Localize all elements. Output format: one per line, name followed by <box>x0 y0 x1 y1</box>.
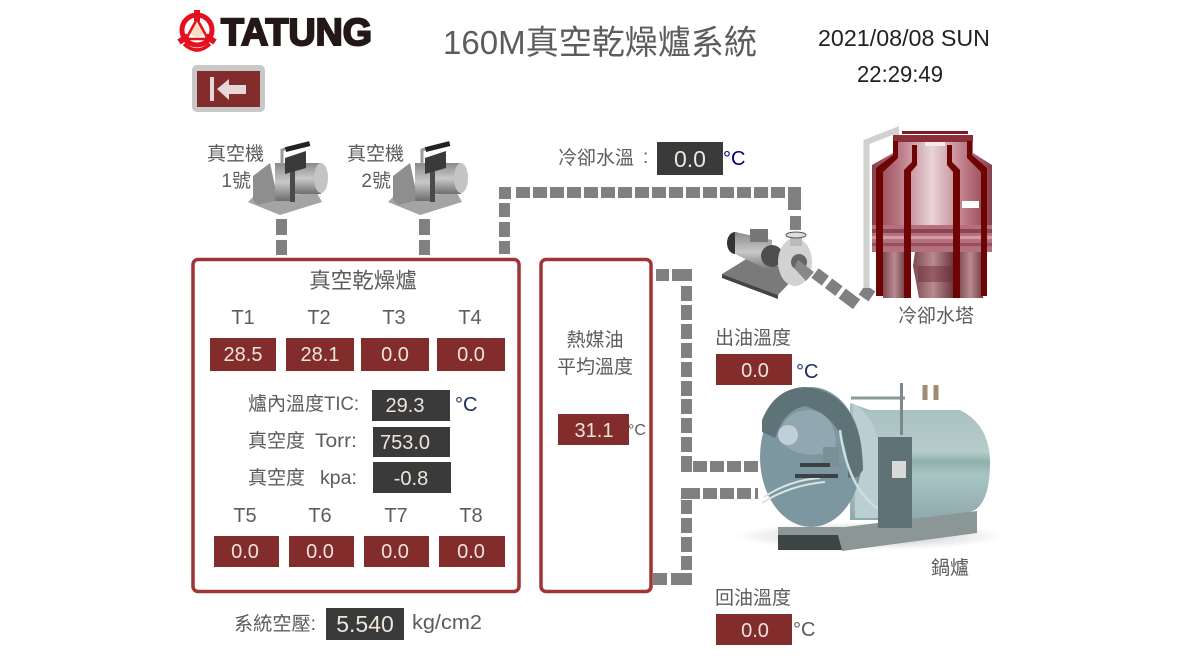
system air pressure: kg/cm2 <box>412 612 482 634</box>
sensors T1 to T4 <box>210 307 505 371</box>
date and time <box>818 25 990 87</box>
back button <box>192 65 265 112</box>
vacuum pump 2: 2號 <box>361 170 391 192</box>
vacuum pump 1: 1號 <box>221 170 251 192</box>
sensors T1 to T4: T1 <box>231 307 255 329</box>
return oil temperature: °C <box>793 619 815 641</box>
vacuum pump 2: 真空機 <box>347 143 404 165</box>
sensors T1 to T4: 28.5 <box>224 344 262 366</box>
readings: °C <box>455 394 477 416</box>
readings: 真空度 <box>248 467 305 489</box>
sensors T1 to T4: T2 <box>307 307 331 329</box>
sensors T5 to T8: T5 <box>233 505 257 527</box>
cooling water temperature <box>558 142 745 175</box>
panel: heat transfer oil: 平均溫度 <box>557 356 633 378</box>
cooling water temperature: 冷卻水溫 <box>558 147 634 169</box>
dashed pipes <box>276 187 875 585</box>
sensors T1 to T4: 28.1 <box>301 344 339 366</box>
outlet oil temperature: 0.0 <box>741 360 769 382</box>
panel: heat transfer oil <box>541 260 651 592</box>
panel: heat transfer oil: °C <box>628 422 646 439</box>
return oil temperature <box>715 587 815 645</box>
boiler front <box>760 387 862 527</box>
system air pressure <box>234 608 482 640</box>
readings: 爐內溫度 <box>248 393 324 415</box>
vacuum pump 2 <box>347 141 468 215</box>
cooling tower <box>866 130 992 327</box>
readings: 29.3 <box>386 395 424 417</box>
readings: -0.8 <box>394 468 428 490</box>
sensors T1 to T4: T4 <box>458 307 482 329</box>
sensors T1 to T4: 0.0 <box>381 344 409 366</box>
date and time: 2021/08/08 SUN <box>818 25 990 51</box>
readings: Torr: <box>315 431 357 452</box>
panel: heat transfer oil: 31.1 <box>575 420 613 442</box>
date and time: 22:29:49 <box>857 61 943 87</box>
sensors T5 to T8: T8 <box>459 505 483 527</box>
sensors T1 to T4: T3 <box>382 307 406 329</box>
sensors T5 to T8: 0.0 <box>457 541 485 563</box>
readings: 真空度 <box>248 430 305 452</box>
water pump <box>722 229 814 299</box>
logo: Tatung: TATUNG <box>221 12 372 54</box>
panel: heat transfer oil: 熱媒油 <box>566 329 624 351</box>
vacuum pump 1: 真空機 <box>207 143 264 165</box>
system air pressure: 5.540 <box>336 611 394 637</box>
readings: 753.0 <box>380 432 430 454</box>
cooling tower: 冷卻水塔 <box>898 305 974 327</box>
readings <box>248 390 477 493</box>
vacuum pump 1 <box>207 141 328 215</box>
cooling water temperature: 0.0 <box>674 146 706 172</box>
cooling water temperature: °C <box>723 148 745 170</box>
readings: kpa: <box>320 468 357 489</box>
sensors T5 to T8: 0.0 <box>381 541 409 563</box>
boiler shell <box>850 403 990 520</box>
heading: 真空乾燥爐 <box>309 269 417 293</box>
boiler: 鍋爐 <box>931 557 969 579</box>
return oil temperature: 回油溫度 <box>715 587 791 609</box>
boiler <box>735 383 1005 579</box>
sensors T5 to T8 <box>214 505 505 567</box>
title: 160M真空乾燥爐系統 <box>443 25 757 62</box>
sensors T5 to T8: 0.0 <box>306 541 334 563</box>
readings: TIC: <box>324 394 359 415</box>
outlet oil temperature: °C <box>796 361 818 383</box>
outlet oil temperature <box>715 327 818 385</box>
cooling water temperature: : <box>643 147 648 168</box>
sensors T5 to T8: T7 <box>384 505 408 527</box>
boiler base <box>778 511 977 551</box>
sensors T1 to T4: 0.0 <box>457 344 485 366</box>
outlet oil temperature: 出油溫度 <box>715 327 791 349</box>
return oil temperature: 0.0 <box>741 620 769 642</box>
system air pressure: 系統空壓: <box>234 613 316 635</box>
sensors T5 to T8: T6 <box>308 505 332 527</box>
panel: vacuum drying furnace <box>193 260 519 592</box>
sensors T5 to T8: 0.0 <box>231 541 259 563</box>
